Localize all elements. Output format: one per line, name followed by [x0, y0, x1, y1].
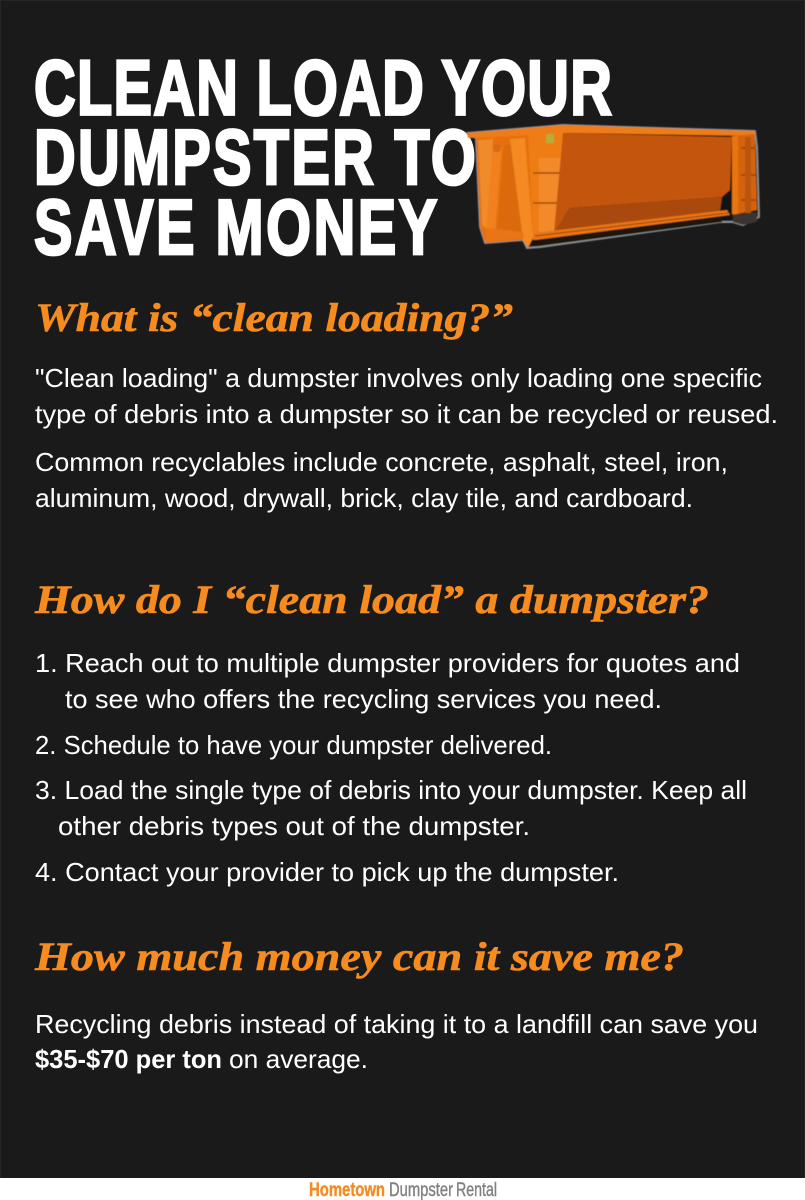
title: DUMPSTER TO	[34, 113, 476, 201]
text block: savings	[35, 1009, 758, 1074]
numbered list of steps: to see who offers the recycling services you need.	[65, 684, 662, 714]
numbered list of steps: 1. Reach out to multiple dumpster providers for quotes and	[35, 648, 740, 678]
heading: how much money: How much money can it save me?	[34, 934, 684, 979]
text block: common recyclables: Common recyclables include concrete, asphalt, steel, iron,	[35, 447, 728, 477]
text block: definition: "Clean loading" a dumpster involves only loading one specific	[35, 363, 762, 393]
text block: common recyclables	[35, 447, 728, 513]
heading: how do I clean load: How do I “clean load” a dumpster?	[34, 577, 709, 622]
text block: savings: $35-$70 per ton	[35, 1044, 222, 1074]
numbered list of steps: other debris types out of the dumpster.	[58, 811, 530, 841]
icon: orange dumpster	[467, 125, 759, 248]
title	[34, 44, 612, 271]
numbered list of steps: 2. Schedule to have your dumpster delivered.	[35, 730, 552, 760]
text block: common recyclables: aluminum, wood, drywall, brick, clay tile, and cardboard.	[35, 483, 693, 513]
text block: definition: type of debris into a dumpster so it can be recycled or reused.	[35, 399, 778, 429]
footer bar with logo	[0, 1178, 805, 1200]
title: CLEAN LOAD YOUR	[34, 44, 612, 131]
numbered list of steps	[35, 648, 747, 887]
numbered list of steps: 3. Load the single type of debris into your dumpster. Keep all	[35, 775, 747, 805]
title: SAVE MONEY	[34, 183, 437, 271]
text block: definition	[35, 363, 778, 429]
text block: savings: on average.	[229, 1044, 368, 1074]
heading: what is clean loading: What is “clean loading?”	[35, 295, 513, 340]
numbered list of steps: 4. Contact your provider to pick up the dumpster.	[35, 857, 619, 887]
text block: savings: Recycling debris instead of taking it to a landfill can save you	[35, 1009, 758, 1039]
